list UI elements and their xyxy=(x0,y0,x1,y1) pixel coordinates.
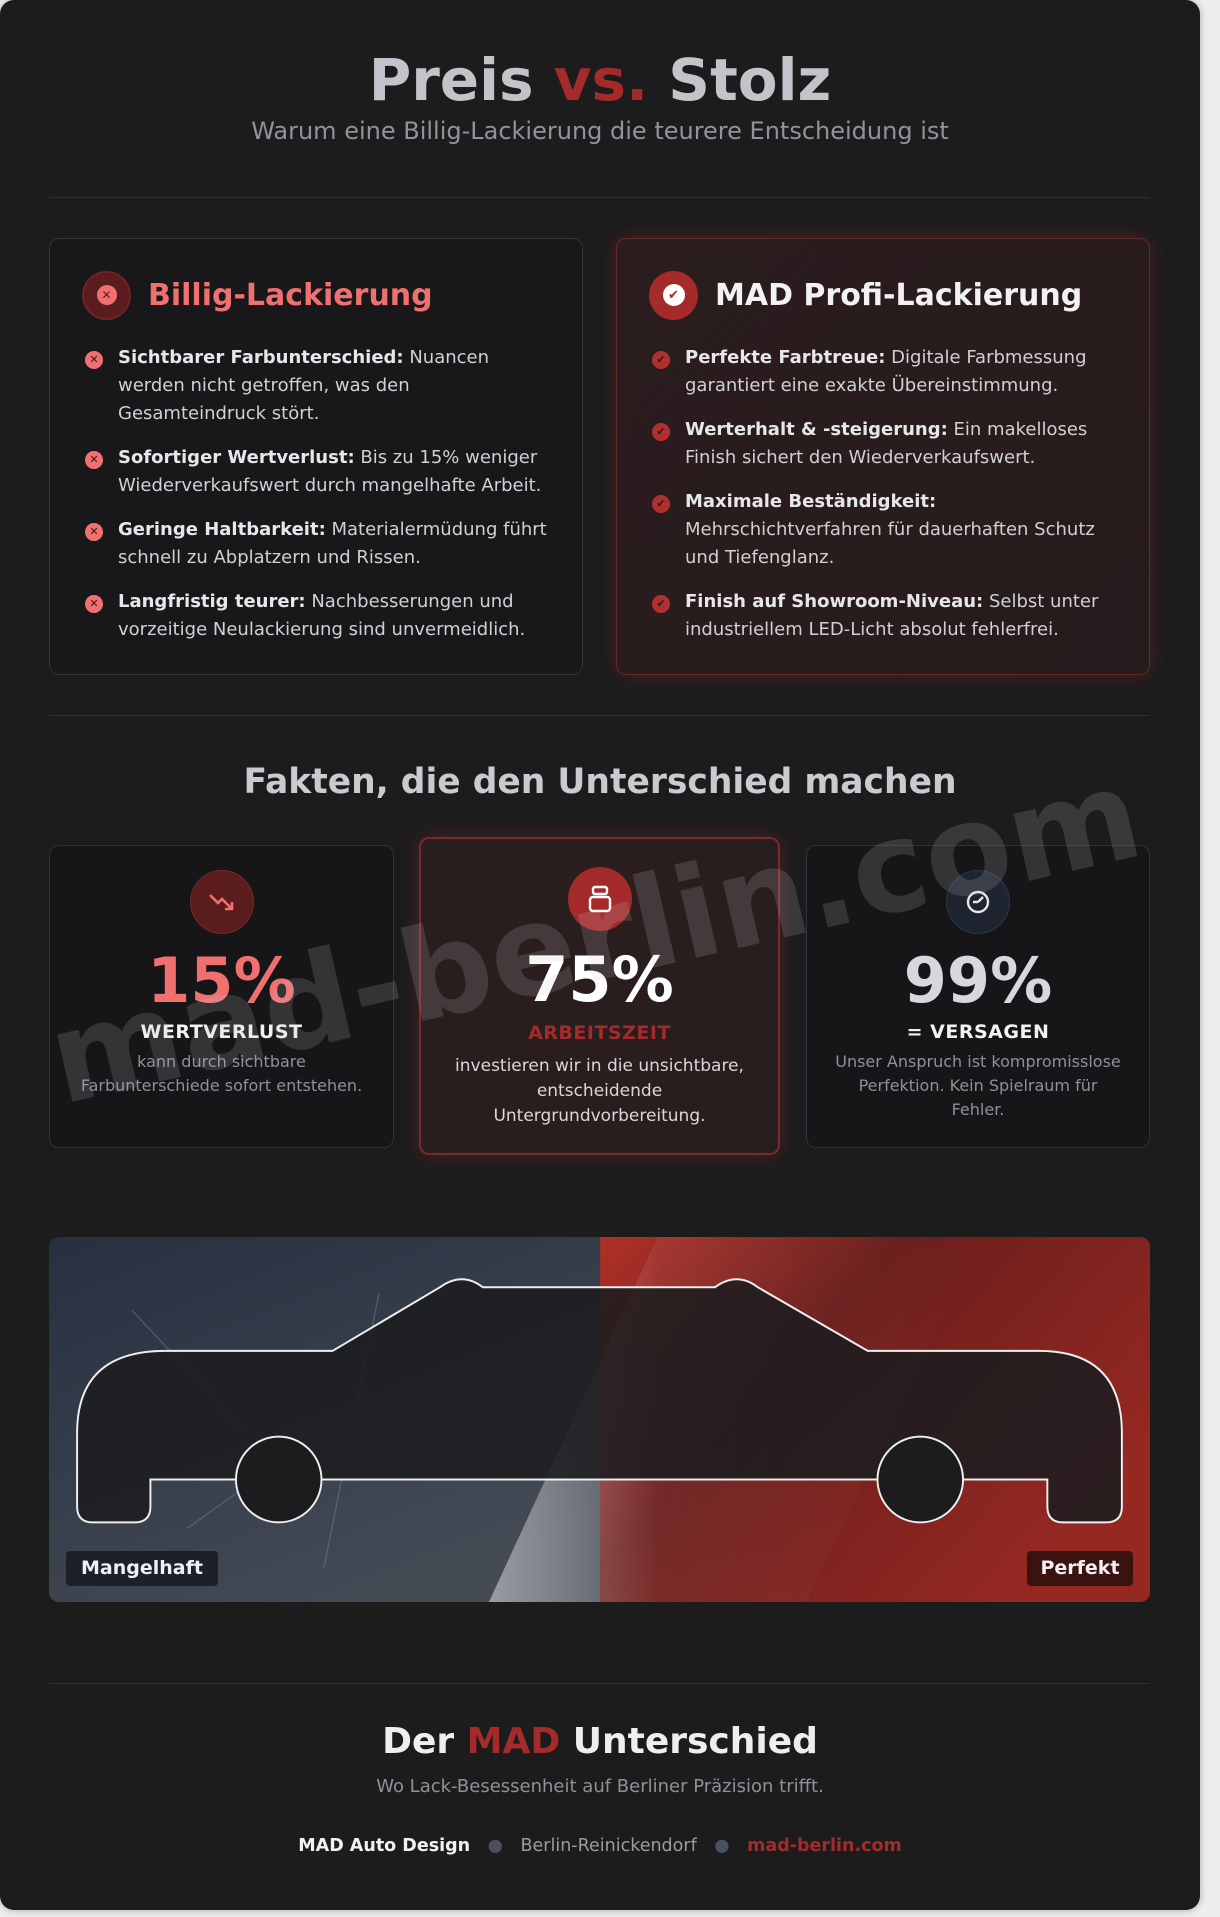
list: negatives: Sofortiger Wertverlust: Bis zu 15% weniger Wiederverkaufswert durch mangelhafte Arbeit. xyxy=(118,447,541,496)
stat card: 15% xyxy=(49,845,394,1148)
list: positives: Finish auf Showroom-Niveau: Selbst unter industriellem LED-Licht absolut fehlerfrei. xyxy=(685,591,1098,640)
heading: Billig: Billig-Lackierung xyxy=(148,278,433,312)
list: positives: Werterhalt & -steigerung: Ein makelloses Finish sichert den Wiederverkaufswert. xyxy=(685,419,1087,468)
description: investieren wir in die unsichtbare, entscheidende Untergrundvorbereitung. xyxy=(455,1056,744,1126)
description: Unser Anspruch ist kompromisslose Perfektion. Kein Spielraum für Fehler. xyxy=(835,1052,1121,1119)
description: kann durch sichtbare Farbunterschiede sofort entstehen. xyxy=(81,1052,362,1095)
number: 75% xyxy=(525,943,674,1016)
section heading: Fakten: Fakten, die den Unterschied machen xyxy=(243,762,957,802)
list: positives: Maximale Beständigkeit: Mehrschichtverfahren für dauerhaften Schutz und Tiefenglanz. xyxy=(685,491,1095,568)
list: positives: ✔ xyxy=(656,497,666,510)
panel: MAD Profi-Lackierung xyxy=(616,238,1150,675)
number: 15% xyxy=(147,944,296,1017)
heading: Billig: ✕ xyxy=(101,288,112,302)
stat card: 99% xyxy=(806,845,1150,1148)
footer heading: Der MAD Unterschied xyxy=(382,1721,818,1762)
list: negatives: Sichtbarer Farbunterschied: Nuancen werden nicht getroffen, was den Gesamteindruck stört. xyxy=(118,347,489,424)
list: negatives xyxy=(85,347,547,640)
list: negatives: Geringe Haltbarkeit: Materialermüdung führt schnell zu Abplatzern und Rissen. xyxy=(118,519,547,568)
label: Mangelhaft xyxy=(66,1551,218,1586)
number: 99% xyxy=(904,944,1052,1017)
heading: Profi: ✔ xyxy=(668,288,679,302)
label: ARBEITSZEIT xyxy=(528,1022,671,1044)
label: = VERSAGEN xyxy=(907,1021,1049,1043)
label: Mangelhaft: Mangelhaft xyxy=(81,1557,203,1579)
heading: Billig xyxy=(82,271,433,320)
footer contact line: MAD Auto Design ● Berlin-Reinickendorf ● mad-berlin.com xyxy=(298,1836,902,1856)
list: negatives: ✕ xyxy=(89,525,99,538)
footer tagline: Wo Lack-Besessenheit auf Berliner Präzision trifft. xyxy=(376,1776,824,1797)
car comparison visual xyxy=(49,1237,1150,1602)
watermark: mad-berlin.com xyxy=(36,740,1154,1133)
list: positives xyxy=(652,347,1098,640)
subtitle: Warum eine Billig-Lackierung die teurere Entscheidung ist xyxy=(251,117,949,145)
title: Preis vs. Stolz xyxy=(369,46,831,114)
heading: Profi: MAD Profi-Lackierung xyxy=(715,278,1082,312)
list: positives: ✔ xyxy=(656,353,666,366)
stat card: 75% xyxy=(419,837,780,1155)
heading: Profi xyxy=(649,271,1082,320)
label: WERTVERLUST xyxy=(140,1021,302,1043)
list: negatives: Langfristig teurer: Nachbesserungen und vorzeitige Neulackierung sind unvermeidlich. xyxy=(118,591,525,640)
list: positives: ✔ xyxy=(656,597,666,610)
car outline xyxy=(77,1279,1122,1522)
icon: paint can xyxy=(568,867,632,931)
list: negatives: ✕ xyxy=(89,353,99,366)
list: positives: ✔ xyxy=(656,425,666,438)
list: positives: Perfekte Farbtreue: Digitale Farbmessung garantiert eine exakte Übereinstimmung. xyxy=(685,347,1086,396)
panel: Billig-Lackierung xyxy=(49,238,583,675)
label: Perfekt: Perfekt xyxy=(1040,1557,1120,1579)
list: negatives: ✕ xyxy=(89,453,99,466)
label: Perfekt xyxy=(1027,1551,1133,1586)
icon: trend down xyxy=(190,870,254,934)
icon: gauge xyxy=(946,870,1010,934)
list: negatives: ✕ xyxy=(89,597,99,610)
